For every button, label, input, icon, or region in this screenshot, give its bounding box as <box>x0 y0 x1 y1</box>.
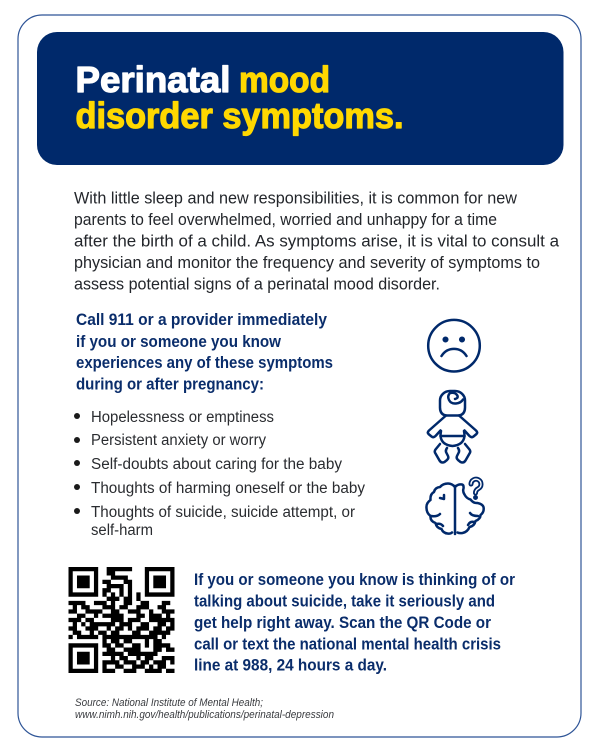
title: mood <box>239 59 330 100</box>
call to action heading <box>76 311 333 394</box>
source note: www.nimh.nih.gov/health/publications/perinatal-depression <box>75 709 334 721</box>
symptom list: Hopelessness or emptiness <box>91 409 274 426</box>
title <box>76 59 404 136</box>
call to action heading: experiences any of these symptoms <box>76 354 333 372</box>
icon: baby <box>428 391 477 462</box>
crisis line callout: line at 988, 24 hours a day. <box>194 656 387 674</box>
symptom list: Thoughts of suicide, suicide attempt, or <box>91 504 355 521</box>
title banner <box>37 32 564 165</box>
symptom list: Thoughts of harming oneself or the baby <box>91 480 365 497</box>
icon: sad face <box>428 320 480 372</box>
intro paragraph: physician and monitor the frequency and severity of symptoms to <box>74 253 540 272</box>
source note <box>75 697 334 721</box>
crisis line callout <box>194 571 516 674</box>
QR code <box>66 565 177 675</box>
call to action heading: Call 911 or a provider immediately <box>76 311 328 329</box>
intro paragraph: assess potential signs of a perinatal mood disorder. <box>74 274 440 294</box>
symptom list <box>74 409 365 539</box>
intro paragraph: after the birth of a child. As symptoms arise, it is vital to consult a <box>74 232 560 250</box>
crisis line callout: call or text the national mental health crisis <box>194 636 501 654</box>
symptom list: Persistent anxiety or worry <box>91 432 266 449</box>
crisis line callout: If you or someone you know is thinking of or <box>194 571 516 589</box>
source note: Source: National Institute of Mental Health; <box>75 697 263 709</box>
symptom list: self-harm <box>91 522 153 539</box>
icon: brain with question mark <box>426 479 484 534</box>
intro paragraph: With little sleep and new responsibilities, it is common for new <box>74 188 518 208</box>
call to action heading: during or after pregnancy: <box>76 376 264 394</box>
call to action heading: if you or someone you know <box>76 333 281 351</box>
crisis line callout: get help right away. Scan the QR Code or <box>194 614 492 632</box>
intro paragraph <box>74 188 560 294</box>
title: Perinatal <box>76 59 230 100</box>
title: disorder symptoms. <box>76 95 404 136</box>
crisis line callout: talking about suicide, take it seriously and <box>194 592 495 610</box>
symptom list: Self-doubts about caring for the baby <box>91 456 342 473</box>
intro paragraph: parents to feel overwhelmed, worried and unhappy for a time <box>74 210 497 229</box>
